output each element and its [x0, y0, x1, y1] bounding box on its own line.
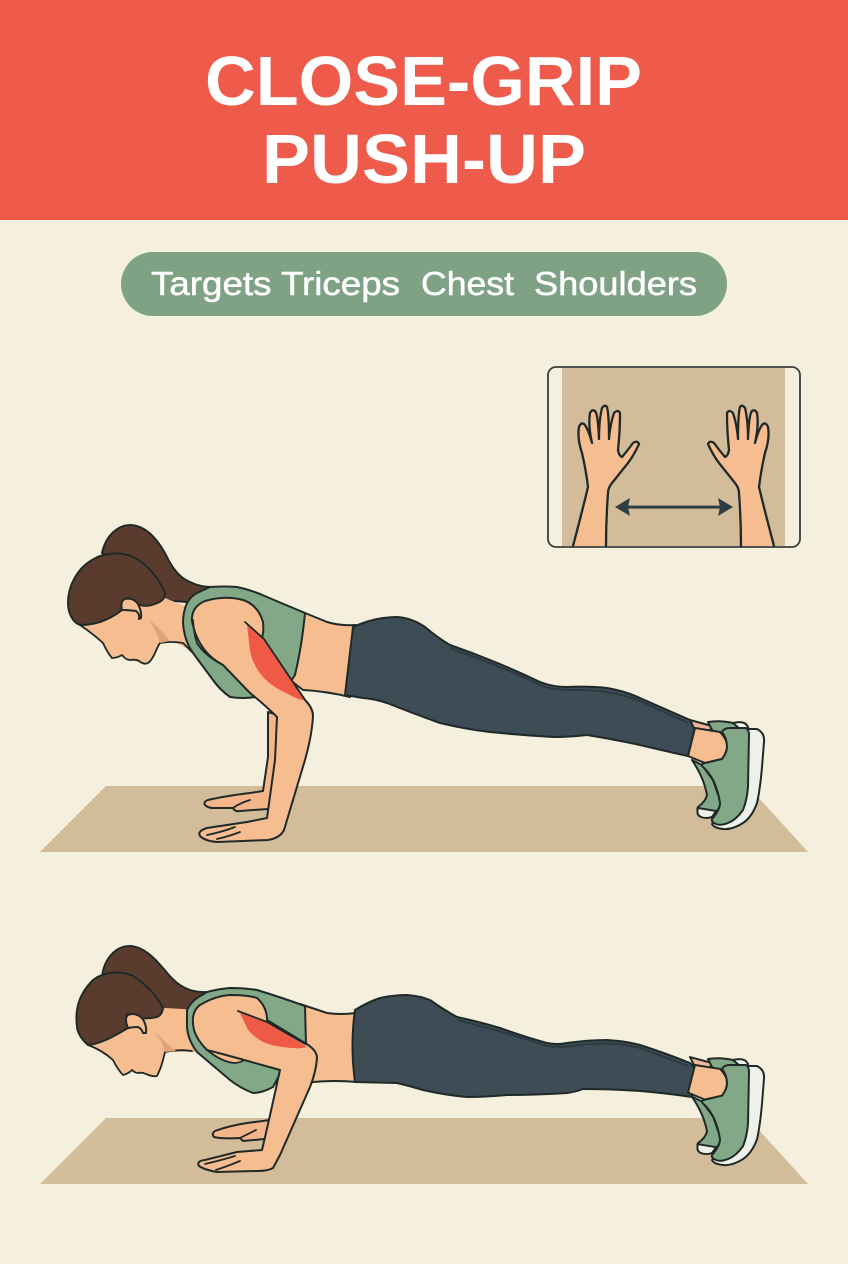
icon: right hand — [708, 406, 774, 546]
leggings — [345, 617, 695, 756]
target muscles pill: Chest — [421, 265, 514, 302]
feet and shoes — [688, 1057, 764, 1165]
target muscles pill: Shoulders — [534, 265, 697, 302]
target muscles pill — [121, 252, 727, 316]
title: PUSH-UP — [262, 120, 586, 198]
ponytail — [102, 946, 207, 1012]
leggings shading — [457, 1020, 688, 1066]
far arm and hand — [213, 1070, 290, 1141]
title — [205, 42, 642, 198]
torso skin — [290, 611, 356, 697]
target muscles pill: Targets Triceps — [151, 265, 400, 302]
front hair — [76, 973, 163, 1045]
near arm and hand — [193, 995, 317, 1172]
face and neck — [80, 598, 195, 664]
ear — [121, 599, 141, 619]
title: CLOSE-GRIP — [205, 42, 642, 120]
neck shadow — [153, 1030, 176, 1052]
leggings shading — [450, 648, 688, 723]
figure: lowered push-up position — [76, 946, 764, 1172]
icon: left hand — [573, 406, 639, 546]
sports bra — [187, 988, 306, 1093]
face and neck — [88, 1008, 200, 1076]
ear — [126, 1014, 146, 1033]
feet and shoes — [688, 720, 764, 829]
bra strap line — [193, 620, 223, 665]
near arm and hand — [192, 598, 313, 842]
chest skin under arm — [207, 1050, 246, 1063]
exercise mat: top position — [40, 786, 808, 852]
far arm and hand — [204, 712, 285, 811]
header banner — [0, 0, 848, 220]
torso skin — [296, 1004, 357, 1082]
ponytail — [102, 525, 212, 602]
triceps highlight — [247, 625, 305, 700]
neck shadow — [149, 620, 170, 643]
exercise mat: bottom position — [40, 1118, 808, 1184]
arrow: hand width — [615, 498, 733, 516]
inset: hand placement — [548, 367, 800, 547]
front hair — [68, 553, 165, 625]
leggings — [352, 995, 695, 1097]
figure: top push-up position — [68, 525, 764, 842]
triceps highlight — [240, 1013, 307, 1048]
sports bra — [183, 586, 305, 698]
